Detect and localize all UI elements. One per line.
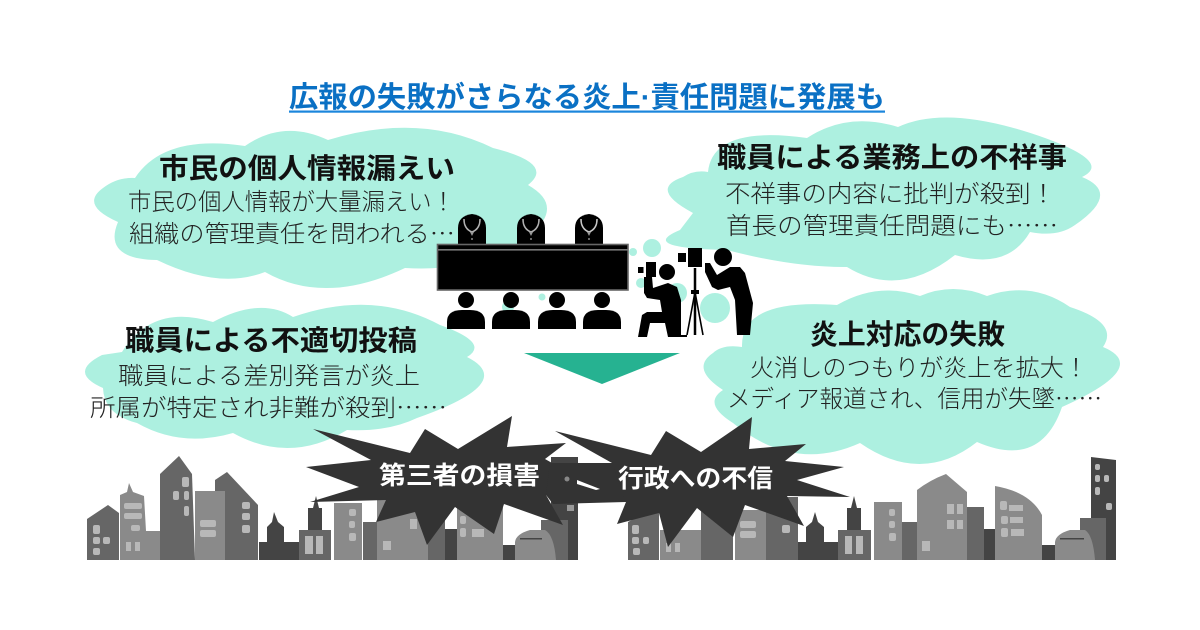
title: 広報の失敗がさらなる炎上·責任問題に発展も	[289, 80, 885, 114]
burst label: third-party damage: 第三者の損害	[379, 462, 540, 490]
cloud: inappropriate post	[85, 305, 484, 448]
table	[438, 244, 628, 290]
text: flaming response failure: メディア報道され、信用が失墜……	[727, 379, 1102, 414]
skyline: left	[87, 456, 578, 560]
skyline: right	[628, 457, 1116, 560]
icon: standing photographer with tripod	[678, 248, 753, 335]
detail: overlap between bursts	[546, 463, 625, 511]
text: personal data leak	[128, 153, 455, 249]
text: inappropriate post: 職員による差別発言が炎上	[118, 363, 420, 390]
text: staff misconduct: 不祥事の内容に批判が殺到！	[725, 181, 1056, 208]
text: flaming response failure: 炎上対応の失敗	[810, 319, 1005, 350]
small thought bubbles	[502, 239, 730, 323]
burst label: distrust of government: 行政への不信	[618, 465, 773, 493]
text: staff misconduct: 首長の管理責任問題にも ……	[726, 206, 1058, 241]
cloud: staff misconduct	[666, 117, 1100, 280]
text: staff misconduct: 職員による業務上の不祥事	[717, 142, 1067, 173]
text: personal data leak: 市民の個人情報漏えい	[159, 153, 455, 184]
text: inappropriate post: 所属が特定され非難が殺到 ……	[90, 388, 447, 423]
text: inappropriate post	[90, 325, 447, 423]
audience	[447, 292, 621, 329]
burst: distrust of government	[553, 417, 850, 547]
cloud: flaming response failure	[704, 289, 1120, 464]
icon: press conference	[438, 214, 628, 329]
cloud: personal data leak	[94, 128, 547, 288]
arrow: down triangle	[524, 353, 680, 384]
text: personal data leak: 組織の管理責任を問われる …	[129, 214, 455, 249]
text: personal data leak: 市民の個人情報が大量漏えい！	[128, 189, 455, 216]
icon: kneeling photographer	[638, 262, 687, 337]
text: inappropriate post: 職員による不適切投稿	[125, 325, 417, 356]
burst: third-party damage	[306, 416, 600, 545]
text: flaming response failure	[727, 319, 1102, 414]
text: staff misconduct	[717, 142, 1067, 241]
text: flaming response failure: 火消しのつもりが炎上を拡大！	[750, 355, 1088, 382]
officials behind table	[458, 214, 603, 244]
